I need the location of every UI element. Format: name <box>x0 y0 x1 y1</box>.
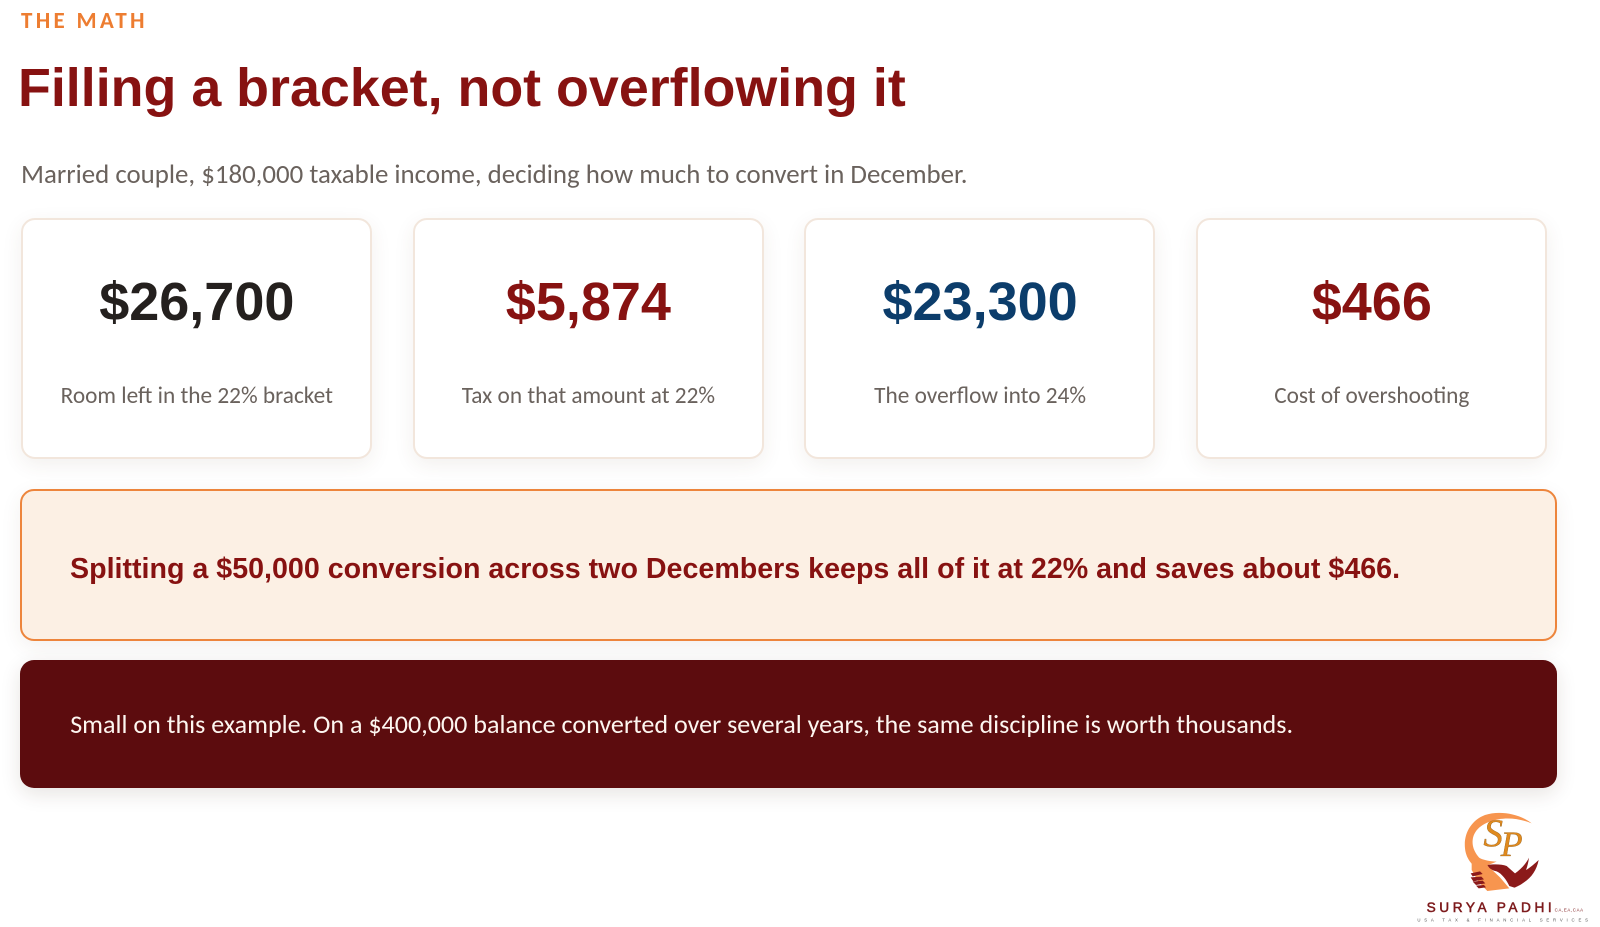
banner: small on this example <box>20 660 1557 788</box>
stat value: $5,874 <box>506 272 671 332</box>
stat value: $466 <box>1312 272 1432 332</box>
stat value: $23,300 <box>882 272 1078 332</box>
logo tagline: USA TAX & FINANCIAL SERVICES <box>1417 918 1588 923</box>
stat value: $26,700 <box>99 272 294 332</box>
callout text: Splitting a $50,000 conversion across two Decembers keeps all of it at 22% and saves about $466. <box>70 553 1400 585</box>
panel: overflow into 24% <box>804 218 1155 459</box>
logo name: SURYA PADHI <box>1427 900 1552 915</box>
stat label: The overflow into 24% <box>874 382 1086 410</box>
stat label: Room left in the 22% bracket <box>61 382 333 410</box>
icon: logo mark <box>1465 811 1539 891</box>
panel: room left in bracket <box>21 218 372 459</box>
icon: logo mark: P <box>1500 824 1523 864</box>
stat label: Cost of overshooting <box>1274 382 1469 410</box>
icon: logo mark: S <box>1483 811 1503 855</box>
callout: splitting conversion <box>20 489 1557 641</box>
panel: cost of overshooting <box>1196 218 1547 459</box>
banner text: Small on this example. On a $400,000 balance converted over several years, the same discipline is worth thousands. <box>70 709 1293 741</box>
stat label: Tax on that amount at 22% <box>462 382 715 410</box>
title: Filling a bracket, not overflowing it <box>18 58 906 118</box>
logo: Surya Padhi <box>1417 811 1588 923</box>
subtitle: Married couple, $180,000 taxable income, deciding how much to convert in December. <box>21 158 967 191</box>
eyebrow: the math: THE MATH <box>21 7 148 35</box>
logo credentials: CA,EA,CAA <box>1555 908 1583 913</box>
panel: tax at 22% <box>413 218 764 459</box>
